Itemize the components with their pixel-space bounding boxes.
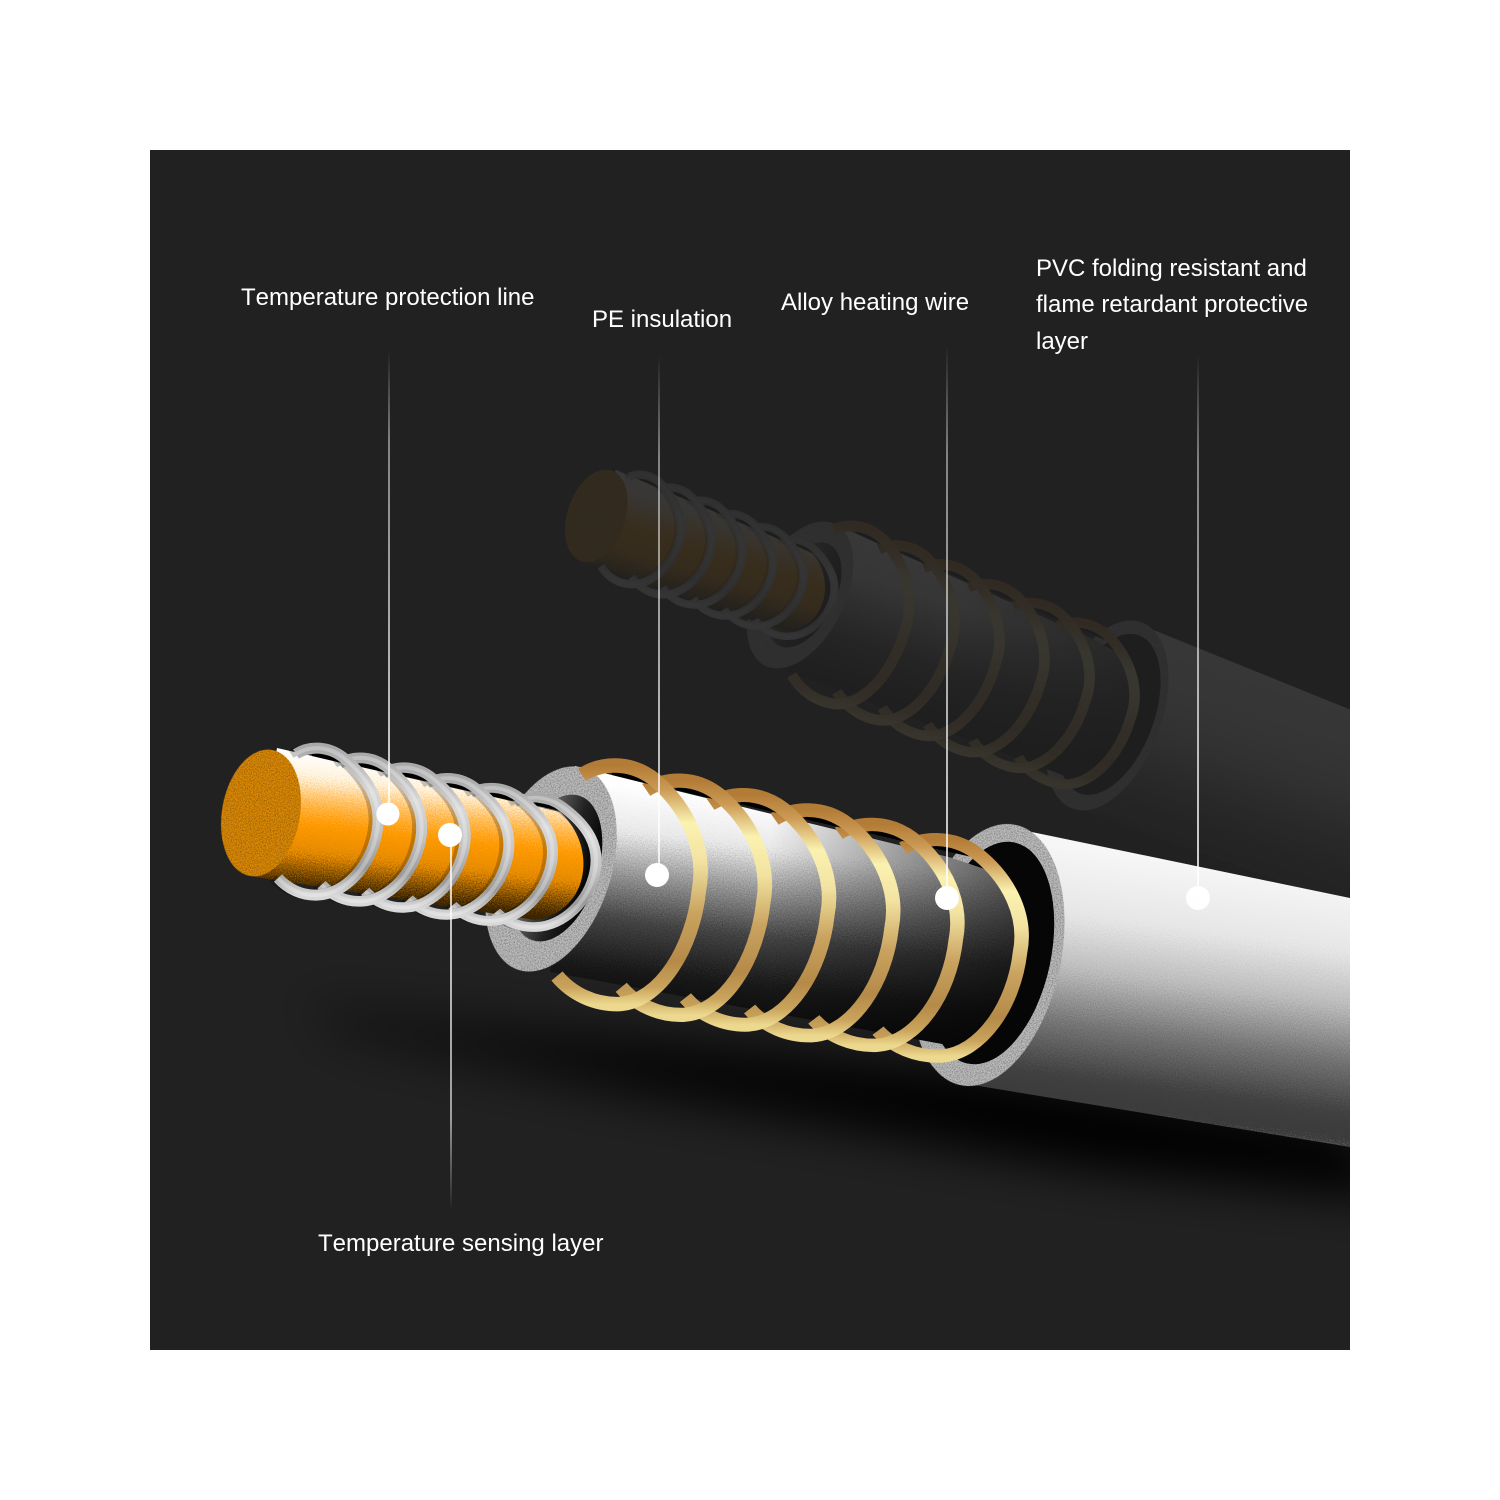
cable ground shadow: [388, 1018, 1350, 1209]
callout: temperature sensing layer: Temperature sensing layer: [318, 1230, 603, 1257]
panel: dark background: [150, 150, 1350, 1350]
callout: temperature sensing layer: [318, 823, 603, 1257]
callout: PE insulation: PE insulation: [592, 306, 732, 333]
callout: alloy heating wire: [781, 289, 969, 910]
callout: PE insulation: [592, 306, 732, 887]
callout: temperature protection line: [241, 284, 534, 826]
ghost cable reflection: [565, 470, 1350, 842]
callout: alloy heating wire: Alloy heating wire: [781, 289, 969, 316]
callout: temperature protection line: Temperature protection line: [241, 284, 534, 311]
callout: PVC protective layer: layer: [1036, 328, 1088, 355]
callout: PVC protective layer: flame retardant protective: [1036, 291, 1308, 318]
callout: PVC protective layer: [1036, 255, 1308, 910]
callout: PVC protective layer: PVC folding resistant and: [1036, 255, 1307, 282]
main heating cable cutaway: [220, 742, 1350, 1147]
